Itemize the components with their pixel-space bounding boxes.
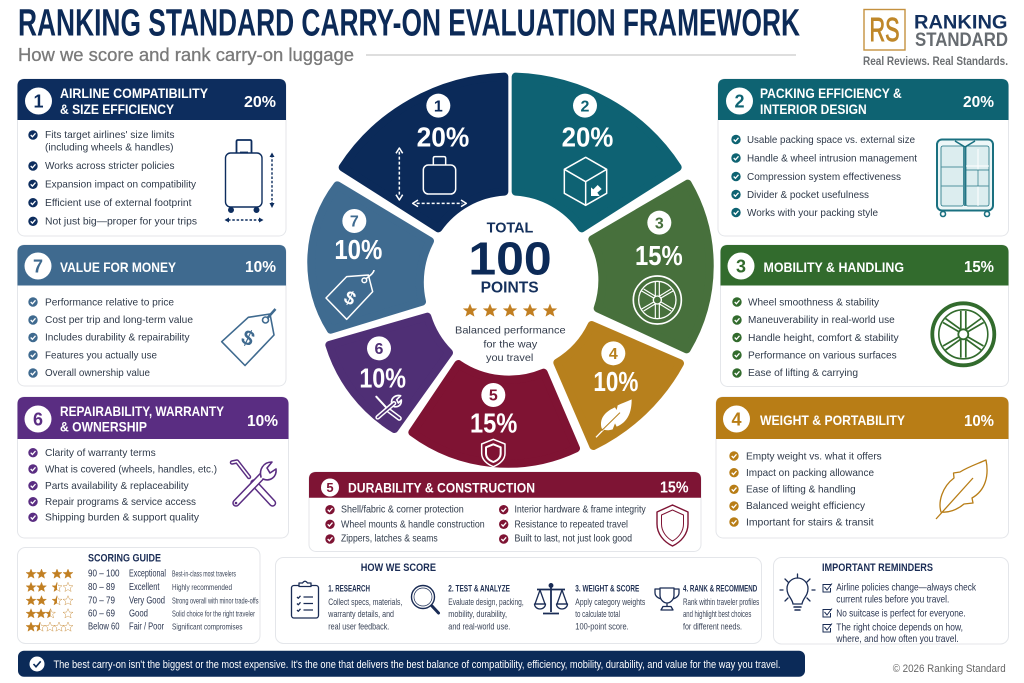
panel: scoring guide: 80 – 89 [88,582,115,593]
center label: TOTAL [487,219,533,236]
panel: mobility and handling: MOBILITY & HANDLING [764,259,904,275]
icon: box [564,157,607,205]
panel: scoring guide: 90 – 100 [88,569,120,580]
panel: weight and portability: 10% [964,413,994,430]
panel: packing efficiency: Divider & pocket usefulness [747,190,869,201]
step 2: Evaluate design, packing, [448,597,524,607]
center label: POINTS [481,279,539,296]
step 3: Apply category weights [575,597,646,607]
panel: weight and portability: WEIGHT & PORTABILITY [760,412,906,428]
center label: for the way [483,339,538,350]
panel: mobility and handling: 15% [964,259,994,276]
panel: airline compatibility: Not just big—proper for your trips [45,217,197,228]
panel: important reminders: Airline policies change—always check [836,583,977,594]
step 2: mobility, durability, [448,609,507,619]
subtitle: How we score and rank carry-on luggage [18,45,354,65]
panel: weight and portability: Balanced weight efficiency [746,501,866,512]
step 3: 3. WEIGHT & SCORE [575,584,639,594]
panel: how we score: HOW WE SCORE [361,562,436,574]
panel: packing efficiency: Works with your packing style [747,208,878,219]
panel: mobility and handling: 3 [736,256,746,276]
center label: Balanced performance [455,325,566,336]
segment 2 [516,77,678,228]
icon: price tag [326,270,374,319]
panel: how we score [276,558,762,644]
panel: weight and portability [716,397,1008,538]
segment 7: 7 [350,214,359,231]
step 1: 1. RESEARCH [328,584,370,594]
copyright: © 2026 Ranking Standard [893,663,1006,675]
icon: bag with dimension arrows [396,148,466,207]
step 4: and highlight best choices [683,609,752,619]
panel: durability and construction: Built to last, not just look good [514,534,632,545]
segment 4: 4 [609,346,618,363]
icon: suitcase with dimension arrows [224,140,274,222]
icon: feather [936,460,987,519]
segment 2: 2 [581,98,590,115]
step 2: and real-world use. [448,622,510,632]
panel: mobility and handling: Wheel smoothness & stability [748,297,880,308]
panel: airline compatibility: & SIZE EFFICIENCY [60,101,175,117]
icon: trophy [655,588,679,610]
icon: tools [376,395,401,418]
center label [455,219,566,364]
panel: packing efficiency [718,79,1008,236]
icon: scales [534,584,568,614]
panel: value for money: Cost per trip and long-term value [45,315,193,326]
segment 3: 15% [635,240,683,271]
icon: price tag [222,309,276,366]
star ratings [26,569,73,631]
step 4 [683,584,760,632]
panel: repairability: 6 [33,410,43,430]
segment 1 [343,77,504,228]
bottom banner: The best carry-on isn't the biggest or the most expensive. It's the one that delivers the best balance of compatibility, efficiency, mobility, durability, and value for the way you travel. [54,659,780,671]
panel: value for money: Includes durability & repairability [45,333,190,344]
icon: feather [596,399,632,437]
panel: durability and construction: 5 [326,480,334,495]
panel: scoring guide: Below 60 [88,622,120,633]
panel: weight and portability: 4 [731,410,742,430]
panel: weight and portability: Important for stairs & transit [746,517,874,528]
center label: 100 [468,232,552,284]
panel: value for money: Overall ownership value [45,368,150,379]
segment 6: 6 [375,341,384,358]
panel: weight and portability: Ease of lifting & handling [746,485,856,496]
panel: value for money: 7 [33,256,43,276]
step 1 [328,584,402,632]
checkbox list [823,584,832,632]
logo: RS [870,11,900,48]
panel: scoring guide: Exceptional [129,569,166,580]
panel: scoring guide: Strong overall with minor trade-offs [172,596,258,605]
panel: repairability: REPAIRABILITY, WARRANTY [60,403,225,419]
icon: lightbulb [780,574,815,610]
bottom banner [18,651,805,677]
panel: mobility and handling: Maneuverability in real-world use [748,315,895,326]
panel: packing efficiency: Usable packing space vs. external size [747,135,915,146]
panel: airline compatibility: Expansion impact on compatibility [45,180,197,191]
panel: important reminders: where, and how often you travel. [835,634,959,645]
segment 4: 10% [593,366,638,397]
segment 1: 20% [417,122,469,153]
logo: STANDARD [915,30,1008,51]
panel: repairability: Clarity of warranty terms [45,448,156,459]
panel: durability and construction: Shell/fabric & corner protection [341,505,464,516]
panel: durability and construction: Zippers, latches & seams [341,534,438,545]
panel: durability and construction: 15% [660,479,688,496]
panel: repairability: Shipping burden & support quality [45,513,200,524]
panel: value for money: Features you actually use [45,350,157,361]
step 1: warranty details, and [328,609,394,619]
panel: airline compatibility: (including wheels & handles) [45,142,174,154]
step 2 [448,584,524,632]
step 3: 100-point score. [575,622,629,632]
step 3: to calculate total [575,609,620,619]
icon: shield [657,505,688,546]
step 1: real user feedback. [328,622,389,632]
segment 6 [329,317,449,429]
panel: important reminders [774,558,1008,645]
panel: packing efficiency: PACKING EFFICIENCY & [760,85,902,101]
panel: important reminders: The right choice depends on how, [836,623,963,634]
panel: packing efficiency: INTERIOR DESIGN [760,101,867,117]
logo [863,10,1008,68]
panel: scoring guide: Good [129,608,148,619]
step 3 [575,584,646,632]
panel: scoring guide: 70 – 79 [88,595,115,606]
panel: packing efficiency: 20% [963,94,994,111]
center label: you travel [486,353,533,364]
panel: mobility and handling [720,245,1008,386]
panel: weight and portability: Impact on packing allowance [746,468,874,479]
panel: important reminders: current rules before you travel. [836,594,949,605]
panel: packing efficiency: 2 [734,92,745,112]
panel: durability and construction: DURABILITY & CONSTRUCTION [348,479,535,495]
panel: important reminders: No suitcase is perfect for everyone. [836,609,966,620]
panel: repairability: Parts availability & replaceability [45,481,189,492]
segment 5: 5 [489,388,498,405]
logo: RANKING [914,12,1008,33]
panel: repairability: 10% [247,413,278,430]
panel: packing efficiency: Handle & wheel intrusion management [747,154,917,165]
segment 1: 1 [434,98,443,115]
panel: scoring guide: Solid choice for the right traveler [172,609,255,618]
panel: mobility and handling: Performance on various surfaces [748,350,897,361]
panel: value for money: Performance relative to price [45,297,174,308]
segment 4 [557,325,680,446]
panel: durability and construction: Wheel mounts & handle construction [341,519,485,530]
step 4: for different needs. [683,622,742,632]
segment 2: 20% [562,122,613,153]
panel: scoring guide: Very Good [129,595,165,606]
step 1: Collect specs, materials, [328,597,402,607]
panel: packing efficiency: Compression system effectiveness [747,172,901,183]
panel: airline compatibility [18,79,286,236]
panel: scoring guide: Significant compromises [172,623,242,632]
step 4: 4. RANK & RECOMMEND [683,584,758,594]
icon: wheel [932,303,994,365]
panel: durability and construction: Interior hardware & frame integrity [514,505,646,516]
icon: magnifier [412,586,438,613]
panel: airline compatibility: 20% [244,94,276,111]
panel: scoring guide: SCORING GUIDE [88,553,161,565]
panel: scoring guide: Excellent [129,582,160,593]
icon: price tag: $ [238,326,258,351]
donut chart: score weights [311,77,710,467]
icon: shield [482,439,505,467]
panel: durability and construction: Resistance to repeated travel [514,519,628,530]
panel: airline compatibility: Fits target airlines' size limits [45,130,174,141]
panel: important reminders: IMPORTANT REMINDERS [822,562,933,574]
panel: scoring guide [18,548,260,644]
segment 3: 3 [655,215,664,232]
panel: value for money [18,245,286,386]
panel: scoring guide: Highly recommended [172,583,232,592]
segment 6: 10% [359,362,406,393]
panel: value for money: 10% [245,259,276,276]
icon: wheel [633,276,681,324]
panel: repairability: What is covered (wheels, handles, etc.) [45,464,217,475]
panel: mobility and handling: Ease of lifting & carrying [748,368,858,379]
panel: airline compatibility: 1 [33,92,44,112]
segment 3 [592,184,710,349]
icon: tools [232,462,276,504]
panel: repairability: Repair programs & service access [45,497,196,508]
step 4: Rank within traveler profiles [683,597,760,607]
panel: value for money: VALUE FOR MONEY [60,259,177,275]
segment 5 [412,364,576,467]
icon: open packed suitcase [937,140,993,216]
panel: durability and construction [309,472,701,552]
panel: weight and portability: Empty weight vs. what it offers [746,451,882,462]
icon: price tag: $ [341,286,360,310]
panel: airline compatibility: Works across stricter policies [45,161,174,172]
segment 7 [311,185,430,330]
panel: airline compatibility: AIRLINE COMPATIBILITY [60,85,209,101]
panel: repairability [18,397,288,538]
panel: scoring guide: Fair / Poor [129,622,164,633]
icon: clipboard [292,581,318,618]
segment 7: 10% [334,234,382,265]
segment 5: 15% [470,408,517,439]
panel: repairability: & OWNERSHIP [60,419,147,435]
panel: mobility and handling: Handle height, comfort & stability [748,333,899,344]
panel: scoring guide: 60 – 69 [88,608,115,619]
panel: airline compatibility: Efficient use of external footprint [45,198,192,209]
panel: scoring guide: Best-in-class most travelers [172,570,236,579]
step 2: 2. TEST & ANALYZE [448,584,510,594]
